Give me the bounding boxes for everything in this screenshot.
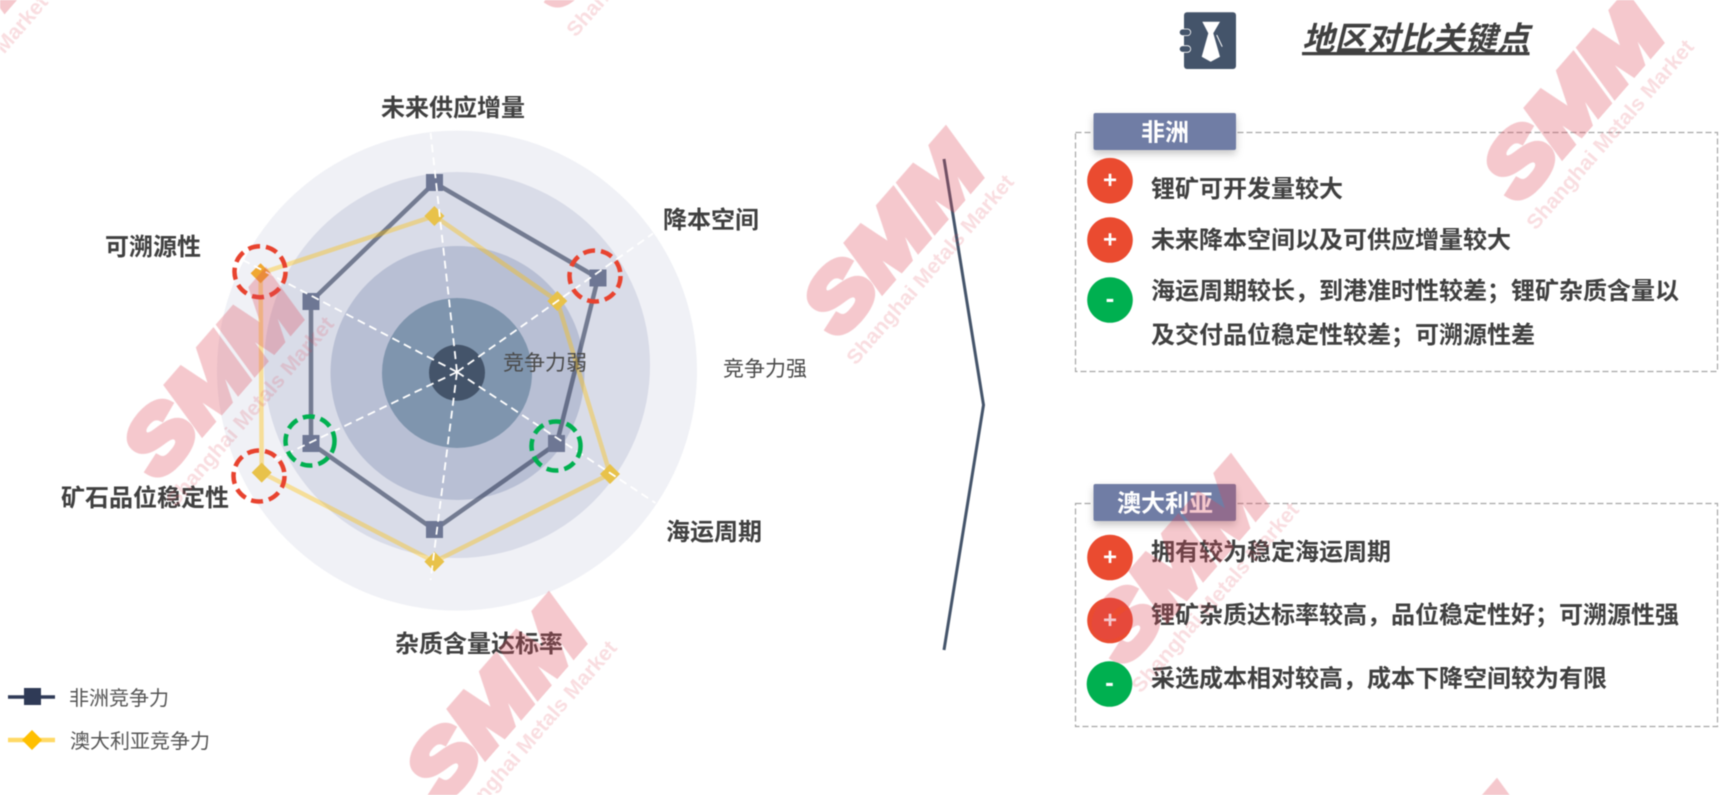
item: plus: 锂矿可开发量较大 — [1151, 176, 1343, 203]
watermarks: SMM — [1465, 0, 1682, 216]
badge: Africa: 非洲 — [1141, 120, 1189, 146]
heading: 地区对比关键点 — [1302, 21, 1533, 57]
panel: Australia — [1076, 484, 1718, 726]
axis labels: 竞争力强 — [723, 358, 807, 381]
badge: Australia — [1094, 484, 1236, 521]
item: plus — [1087, 535, 1391, 580]
axis labels — [61, 95, 807, 658]
watermarks: SMM — [105, 262, 322, 493]
axis labels: 未来供应增量 — [381, 95, 525, 122]
axis labels: 海运周期 — [666, 519, 762, 546]
watermarks: Shanghai Metals Market — [162, 313, 339, 511]
radar spokes — [241, 133, 656, 580]
item: plus: + — [1103, 607, 1117, 634]
panel: Africa — [1076, 113, 1718, 372]
series: Australia — [251, 206, 620, 572]
item: plus: + — [1103, 544, 1117, 571]
item: plus — [1087, 158, 1343, 204]
legend: Africa — [8, 687, 169, 710]
watermarks: Shanghai Metals Market — [1522, 36, 1699, 234]
chevron divider — [944, 159, 984, 650]
radar chart — [217, 131, 697, 611]
radar rings — [217, 131, 697, 611]
item: minus — [1087, 661, 1607, 707]
item: plus: 锂矿杂质达标率较高，品位稳定性好；可溯源性强 — [1151, 601, 1679, 629]
item: plus: + — [1103, 226, 1117, 254]
header icon: notebook with tie — [1179, 12, 1236, 69]
legend — [8, 687, 210, 753]
axis labels: 竞争力弱 — [503, 352, 587, 375]
item: minus: 海运周期较长，到港准时性较差；锂矿杂质含量以 — [1151, 278, 1679, 305]
item: plus: 拥有较为稳定海运周期 — [1151, 539, 1391, 566]
axis labels: 杂质含量达标率 — [395, 631, 563, 658]
axis labels: 矿石品位稳定性 — [61, 484, 229, 512]
item: minus: 采选成本相对较高，成本下降空间较为有限 — [1151, 666, 1607, 692]
badge: Australia: 澳大利亚 — [1117, 490, 1213, 518]
badge: Africa — [1094, 113, 1236, 150]
watermarks: SMM — [1070, 448, 1287, 679]
legend: Australia: 澳大利亚竞争力 — [70, 730, 210, 753]
watermarks: Shanghai Metals Market — [1127, 499, 1304, 697]
item: minus — [1087, 277, 1679, 349]
item: plus: + — [1103, 167, 1117, 194]
item: plus — [1087, 598, 1679, 643]
item: minus: 及交付品位稳定性较差；可溯源性差 — [1151, 321, 1535, 349]
item: minus: - — [1106, 283, 1114, 313]
watermarks: SMM — [785, 120, 1002, 351]
series: Africa — [302, 174, 606, 538]
item: minus: - — [1105, 667, 1114, 697]
item: plus: 未来降本空间以及可供应增量较大 — [1151, 227, 1511, 254]
axis labels: 可溯源性 — [105, 234, 201, 261]
axis labels: 降本空间 — [663, 207, 759, 234]
highlight circles — [234, 246, 620, 502]
legend: Africa: 非洲竞争力 — [69, 687, 169, 710]
watermarks: Shanghai Metals Market — [842, 171, 1019, 369]
legend: Australia — [8, 730, 210, 753]
item: plus — [1087, 217, 1511, 263]
